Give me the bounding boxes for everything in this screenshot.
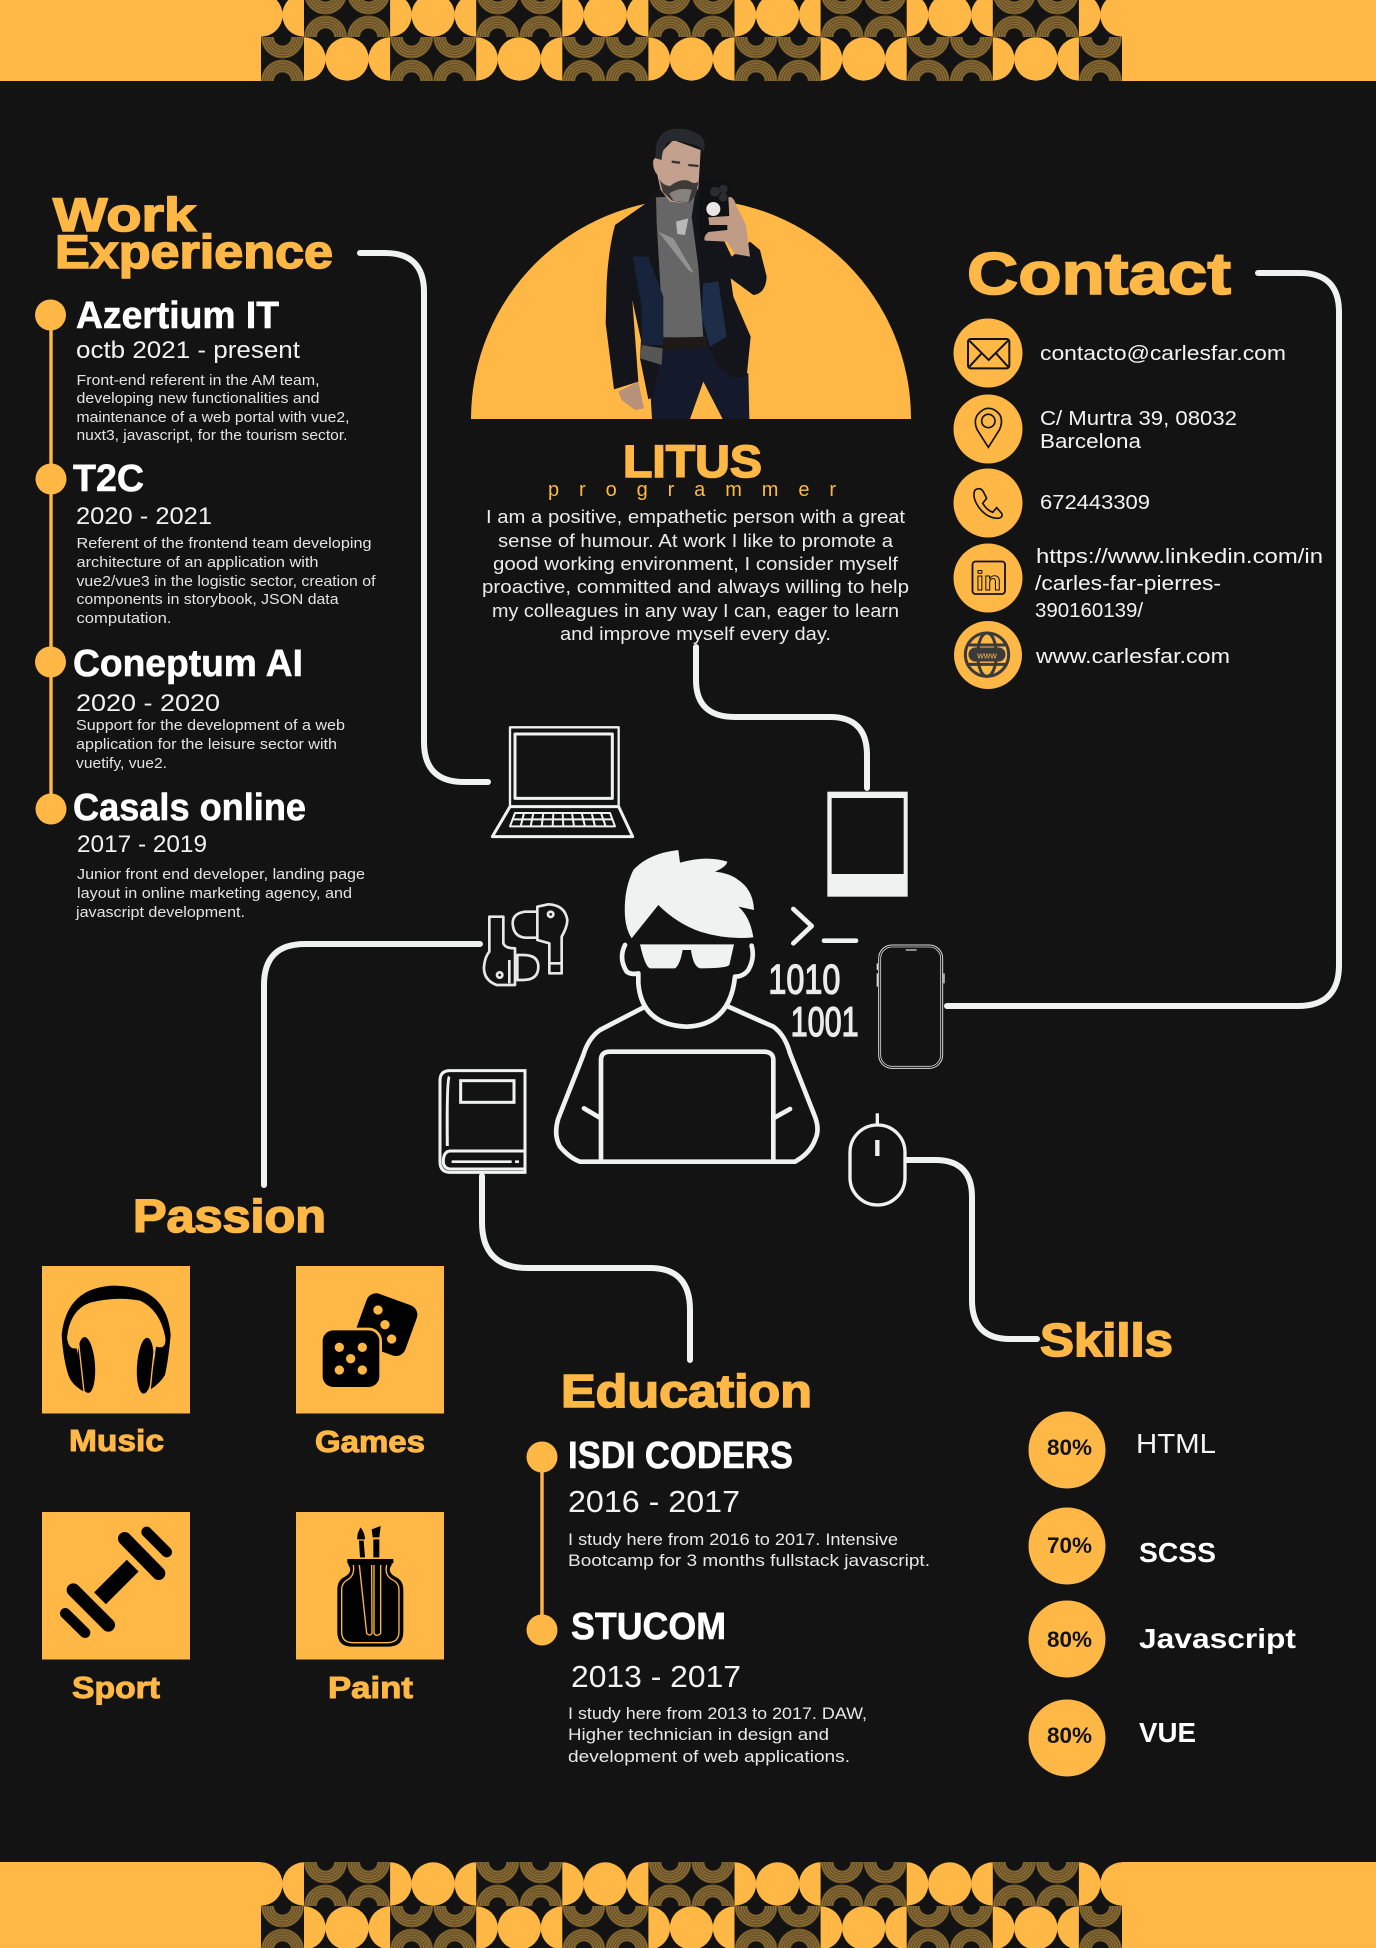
heading: contact: Contact <box>967 241 1231 307</box>
education entry: Stucom: I study here from 2013 to 2017. DAW, <box>568 1704 867 1723</box>
education entry: ISDI Coders: ISDI CODERS <box>568 1435 793 1477</box>
contact row: linkedin: 390160139/ <box>1035 600 1143 622</box>
contact row: address <box>954 394 1237 464</box>
icon: laptop <box>492 727 633 837</box>
skill: SCSS: SCSS <box>1139 1537 1216 1568</box>
job: Casals online: Casals online <box>73 787 306 829</box>
panel: education <box>526 1365 930 1766</box>
skill: Javascript: 80% <box>1047 1627 1092 1652</box>
passion card: paint: Paint <box>328 1670 413 1705</box>
top patterned band <box>0 0 1376 101</box>
contact row: email: contacto@carlesfar.com <box>1040 343 1286 365</box>
heading: work experience <box>53 188 333 278</box>
icon: developer figure <box>556 850 817 1162</box>
skill: Javascript: Javascript <box>1139 1623 1296 1654</box>
job: Azertium IT: maintenance of a web portal with vue2, <box>76 409 350 426</box>
connector: contact to phone <box>947 273 1339 1006</box>
job: T2C: 2020 - 2021 <box>76 503 212 530</box>
icon group: center illustration <box>484 727 944 1205</box>
skill: HTML <box>1028 1412 1216 1488</box>
skill: HTML: 80% <box>1047 1435 1092 1460</box>
heading: skills: Skills <box>1040 1314 1173 1366</box>
education entry: ISDI Coders <box>526 1435 930 1570</box>
contact row: website <box>954 621 1230 689</box>
bottom patterned band <box>0 1842 1376 1948</box>
connector: profile to polaroid <box>696 647 867 788</box>
contact row: address: Barcelona <box>1040 431 1142 453</box>
icon: mouse <box>850 1113 905 1205</box>
education entry: Stucom: Higher technician in design and <box>568 1725 829 1744</box>
skill: VUE <box>1028 1700 1196 1776</box>
skill: SCSS <box>1028 1508 1216 1584</box>
contact row: address: C/ Murtra 39, 08032 <box>1040 408 1237 430</box>
icon: polaroid <box>827 792 908 897</box>
heading: work experience: Experience <box>55 225 333 278</box>
skill: HTML: HTML <box>1136 1428 1216 1459</box>
job: Casals online: javascript development. <box>75 904 245 921</box>
education entry: ISDI Coders: Bootcamp for 3 months fullstack javascript. <box>568 1551 930 1570</box>
passion card: music: Music <box>69 1423 164 1458</box>
binary digits: 1001 <box>791 998 859 1045</box>
job: Coneptum AI: vuetify, vue2. <box>76 755 167 772</box>
skill: VUE: VUE <box>1139 1717 1196 1748</box>
binary digits <box>768 955 859 1045</box>
contact row: linkedin <box>954 544 1323 622</box>
role: programmer <box>548 479 836 501</box>
skill: SCSS: 70% <box>1047 1533 1092 1558</box>
job: T2C: vue2/vue3 in the logistic sector, creation of <box>76 573 376 590</box>
contact row: phone: 672443309 <box>1040 492 1150 514</box>
panel: passion <box>42 1190 444 1705</box>
job: Coneptum AI: application for the leisure sector with <box>76 736 337 753</box>
passion card: games: Games <box>315 1424 425 1459</box>
icon: book <box>440 1071 525 1172</box>
passion card: music <box>42 1266 190 1458</box>
timeline line <box>49 315 53 808</box>
job: T2C: Referent of the frontend team developing <box>76 535 372 552</box>
job: T2C: components in storybook, JSON data <box>76 591 339 608</box>
contact row: linkedin: in <box>976 566 1001 596</box>
profile text: good working environment, I consider myself <box>493 553 899 574</box>
semicircle behind portrait <box>471 199 911 419</box>
panel: profile <box>482 436 909 644</box>
job: Coneptum AI: Support for the development of a web <box>76 717 345 734</box>
job: Azertium IT: octb 2021 - present <box>76 337 300 364</box>
profile text: I am a positive, empathetic person with a great <box>486 506 905 527</box>
binary digits: 1010 <box>768 955 840 1002</box>
skill: VUE: 80% <box>1047 1723 1092 1748</box>
job: Azertium IT: developing new functionalities and <box>76 390 320 407</box>
connector: mouse to skills <box>907 1160 1037 1339</box>
job: T2C <box>36 458 376 627</box>
passion card: sport: Sport <box>72 1670 160 1705</box>
name: LITUS <box>623 436 762 487</box>
education entry: Stucom: STUCOM <box>571 1606 726 1648</box>
panel: skills <box>1028 1314 1296 1776</box>
education entry: Stucom: development of web applications. <box>568 1747 850 1766</box>
profile text <box>482 506 909 644</box>
passion card: sport <box>42 1512 190 1705</box>
icon: terminal prompt <box>793 909 856 943</box>
education entry: Stucom <box>526 1606 867 1766</box>
profile text: sense of humour. At work I like to promote a <box>498 530 894 551</box>
contact row: email <box>954 318 1286 388</box>
job: Casals online <box>36 787 365 921</box>
job: Azertium IT: nuxt3, javascript, for the tourism sector. <box>76 427 348 444</box>
panel: work experience <box>35 188 376 921</box>
contact row: website: www.carlesfar.com <box>1035 646 1230 668</box>
icon: smartphone <box>877 945 944 1068</box>
panel: portrait <box>471 129 911 419</box>
contact row: linkedin: /carles-far-pierres- <box>1035 573 1221 595</box>
job: T2C: computation. <box>76 610 172 627</box>
job: T2C: architecture of an application with <box>76 554 318 571</box>
job: Casals online: layout in online marketing agency, and <box>77 885 352 902</box>
education entry: Stucom: 2013 - 2017 <box>571 1659 741 1694</box>
connector: book to education <box>482 1176 690 1360</box>
heading: education: Education <box>561 1365 812 1417</box>
job: Casals online: Junior front end developer, landing page <box>77 866 365 883</box>
education entry: ISDI Coders: I study here from 2016 to 2017. Intensive <box>568 1530 898 1549</box>
timeline line <box>540 1457 544 1630</box>
job: Azertium IT: Azertium IT <box>76 295 279 337</box>
skill: Javascript <box>1028 1600 1296 1678</box>
connector: earbuds to passion <box>264 944 480 1185</box>
profile text: my colleagues in any way I can, eager to learn <box>492 600 899 621</box>
heading: work experience: Work <box>53 188 197 241</box>
contact row: linkedin: https://www.linkedin.com/in <box>1036 546 1323 568</box>
job: Coneptum AI: 2020 - 2020 <box>76 690 220 717</box>
contact row: phone <box>954 468 1150 538</box>
contact row: website: www <box>976 650 997 660</box>
portrait figure <box>606 129 767 419</box>
education entry: ISDI Coders: 2016 - 2017 <box>568 1484 740 1519</box>
profile text: proactive, committed and always willing to help <box>482 576 909 597</box>
job: Azertium IT <box>35 295 350 444</box>
job: Coneptum AI: Coneptum AI <box>73 643 303 685</box>
passion card: paint <box>296 1512 444 1705</box>
connector: work experience to laptop <box>360 253 488 782</box>
job: Azertium IT: Front-end referent in the AM team, <box>76 372 320 389</box>
job: T2C: T2C <box>73 458 144 500</box>
icon: earbuds <box>484 904 567 985</box>
passion card: games <box>296 1266 444 1459</box>
job: Coneptum AI <box>35 643 345 772</box>
heading: passion: Passion <box>133 1190 326 1242</box>
panel: contact <box>954 241 1323 689</box>
job: Casals online: 2017 - 2019 <box>77 831 207 858</box>
profile text: and improve myself every day. <box>560 623 831 644</box>
